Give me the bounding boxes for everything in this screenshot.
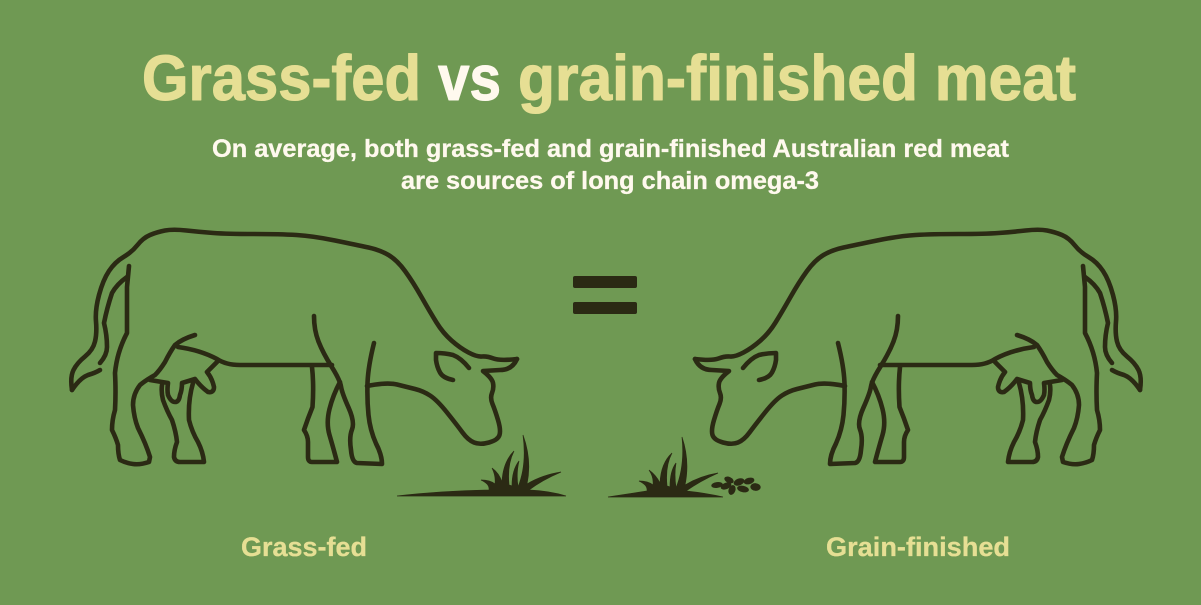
cow: grass-fed: [71, 230, 517, 464]
title: vs: [438, 42, 501, 114]
title: grain-finished meat: [518, 42, 1076, 114]
grains: [711, 475, 761, 496]
subtitle: [212, 135, 1010, 195]
grass: left: [397, 435, 566, 496]
subtitle: On average, both grass-fed and grain-finished Australian red meat: [212, 135, 1010, 163]
subtitle: are sources of long chain omega-3: [401, 167, 819, 195]
title: Grass-fed: [142, 42, 421, 114]
label: grass-fed: Grass-fed: [241, 532, 367, 562]
grass: right: [608, 437, 723, 497]
label: grain-finished: Grain-finished: [826, 532, 1010, 562]
cow: grain-finished: [695, 230, 1141, 464]
title: [142, 42, 1076, 114]
equals sign: [573, 276, 637, 314]
